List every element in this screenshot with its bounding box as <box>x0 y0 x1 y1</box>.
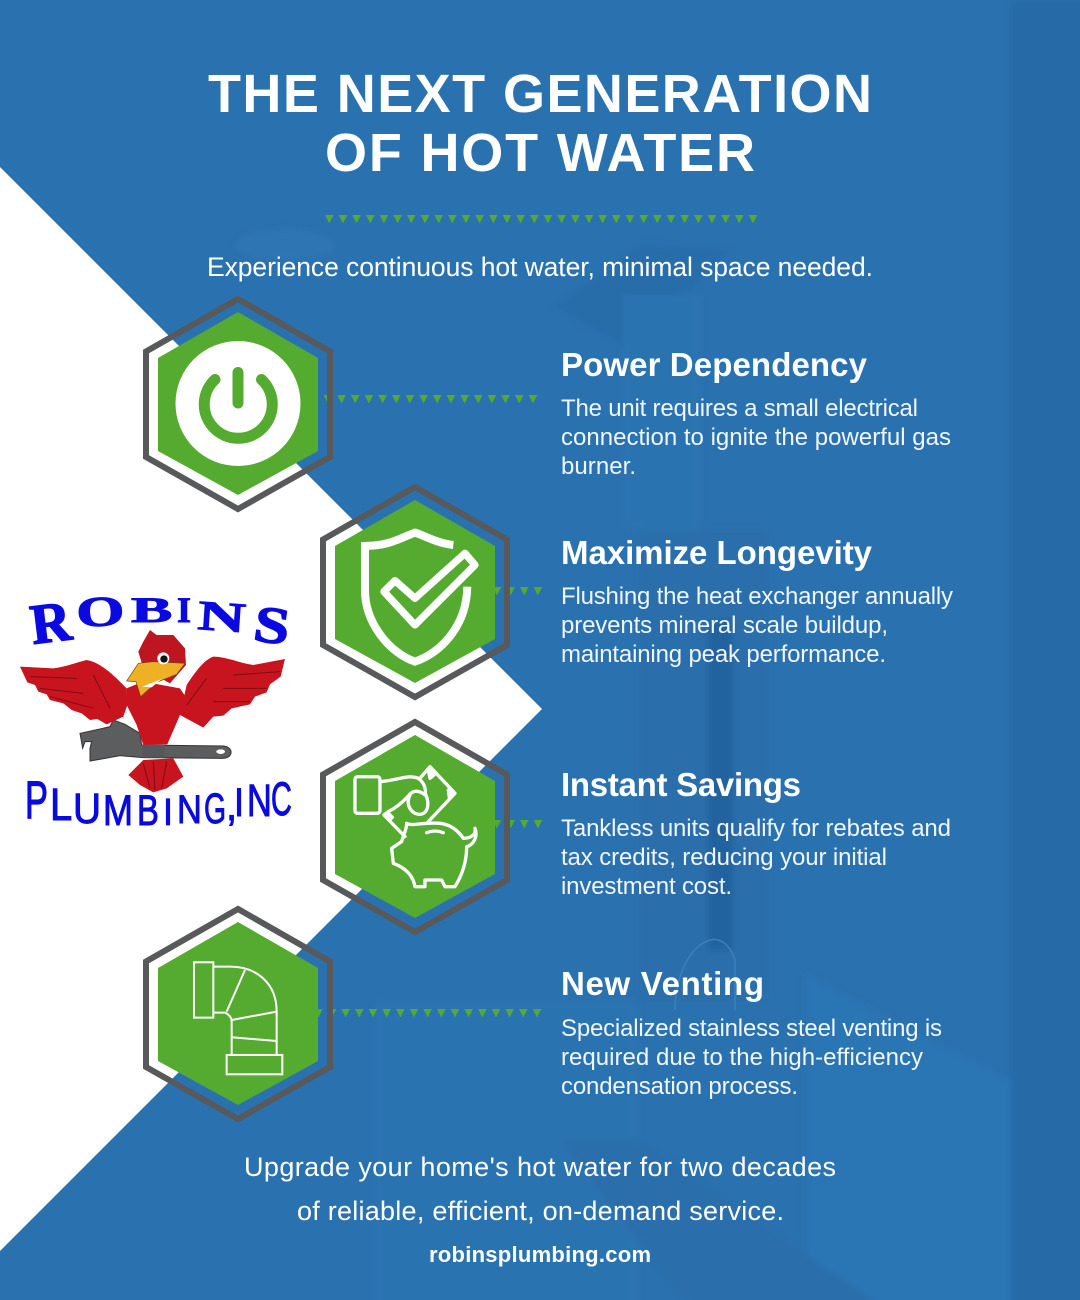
text block: Maximize Longevity: prevents mineral scale buildup, <box>561 612 888 639</box>
subtitle: Experience continuous hot water, minimal space needed. <box>207 252 873 282</box>
logo wordmark: PLUMBING, INC: N <box>247 774 272 826</box>
logo wordmark: PLUMBING, INC <box>25 772 292 835</box>
logo wordmark: PLUMBING, INC: C <box>271 774 292 826</box>
text block: New Venting: New Venting <box>561 965 764 1002</box>
logo mascot: red bird with wrench <box>20 630 285 792</box>
closing statement: Upgrade your home's hot water for two decades <box>244 1152 836 1182</box>
logo wordmark: PLUMBING, INC: I <box>163 790 173 833</box>
text block: Instant Savings: Tankless units qualify for rebates and <box>561 815 951 842</box>
text block: New Venting <box>561 965 942 1100</box>
text block: Instant Savings: Instant Savings <box>561 766 801 803</box>
text block: Maximize Longevity <box>561 534 953 668</box>
dotted connector 3 <box>493 820 543 829</box>
logo wordmark: ROBINS: O <box>75 588 126 637</box>
text block: Maximize Longevity: Flushing the heat exchanger annually <box>561 583 953 610</box>
text block: Power Dependency: The unit requires a small electrical <box>561 395 918 422</box>
logo wordmark: PLUMBING, INC: U <box>73 784 101 832</box>
closing statement <box>244 1152 836 1226</box>
hexagon icon: vent pipe elbow <box>146 909 330 1119</box>
logo wordmark: ROBINS: R <box>27 590 76 657</box>
title: THE NEXT GENERATION <box>208 64 872 124</box>
dotted divider <box>325 215 757 224</box>
logo wordmark: PLUMBING, INC: B <box>137 787 159 835</box>
hexagon icon: shield with check <box>323 487 507 697</box>
text block: Maximize Longevity: Maximize Longevity <box>561 534 873 571</box>
logo: Robins Plumbing <box>20 588 294 835</box>
text block: New Venting: required due to the high-efficiency <box>561 1044 923 1071</box>
website url: robinsplumbing.com <box>429 1242 651 1267</box>
logo wordmark: PLUMBING, INC: G <box>204 784 226 832</box>
text block: Power Dependency: connection to ignite the powerful gas <box>561 424 951 451</box>
title <box>208 64 872 183</box>
hexagon icon: hand, money and piggy bank <box>323 722 507 932</box>
text block: Instant Savings <box>561 766 951 900</box>
title: OF HOT WATER <box>325 123 755 183</box>
text block: Power Dependency: Power Dependency <box>561 346 868 383</box>
text block: Power Dependency <box>561 346 951 480</box>
dotted connector 2 <box>493 587 543 596</box>
logo wordmark: ROBINS: N <box>196 592 247 641</box>
logo wordmark: ROBINS: S <box>250 594 294 656</box>
text block: Power Dependency: burner. <box>561 453 636 480</box>
closing statement: of reliable, efficient, on-demand service. <box>297 1196 784 1226</box>
text block: New Venting: condensation process. <box>561 1073 798 1100</box>
logo wordmark: PLUMBING, INC: , <box>226 780 237 829</box>
text block: Instant Savings: tax credits, reducing your initial <box>561 844 887 871</box>
text block: Instant Savings: investment cost. <box>561 873 732 900</box>
text block: New Venting: Specialized stainless steel venting is <box>561 1015 942 1042</box>
logo wordmark: PLUMBING, INC: L <box>50 780 72 831</box>
dotted connector 4 <box>314 1009 543 1018</box>
logo wordmark: PLUMBING, INC: P <box>25 772 48 830</box>
logo wordmark: ROBINS: B <box>131 590 172 630</box>
logo wordmark: ROBINS <box>27 588 294 657</box>
white diagonal panel <box>0 167 542 1251</box>
logo wordmark: PLUMBING, INC: I <box>234 781 244 825</box>
logo wordmark: ROBINS: I <box>177 590 191 630</box>
text block: Maximize Longevity: maintaining peak performance. <box>561 641 886 668</box>
dotted connector 1 <box>324 395 538 404</box>
logo wordmark: PLUMBING, INC: N <box>177 787 202 832</box>
logo wordmark: PLUMBING, INC: M <box>103 787 133 835</box>
hexagon icon: power <box>146 299 330 509</box>
